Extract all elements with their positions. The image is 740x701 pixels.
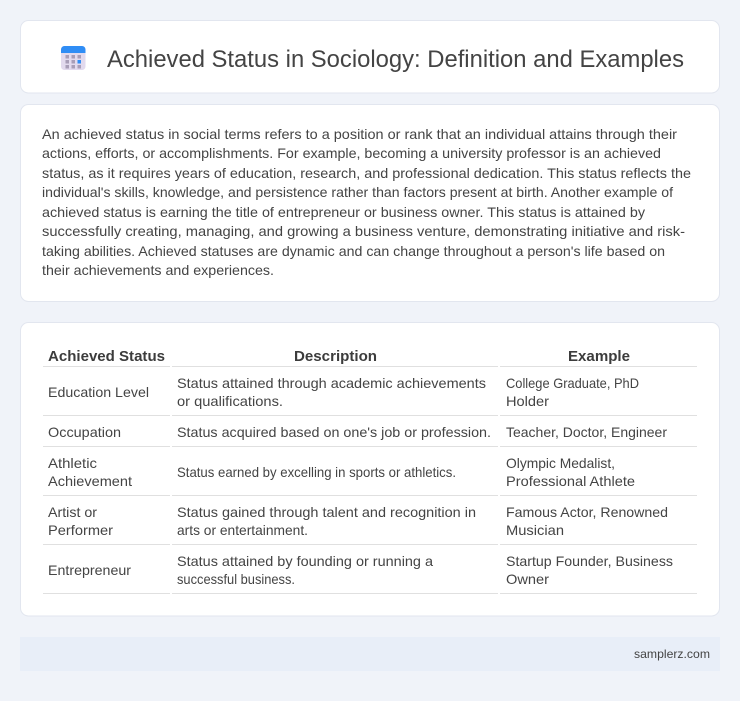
row: artist or performer <box>48 504 668 538</box>
table header: Achieved Status <box>48 348 165 365</box>
row: athletic achievement <box>48 455 635 489</box>
row: athletic achievement: Olympic Medalist, <box>506 455 615 471</box>
footer credit: samplerz.com <box>634 647 710 661</box>
text block: paragraph: taking abilities. Achieved statuses are dynamic and can change throughout a person's life based on <box>42 243 665 259</box>
panel: title card <box>20 20 720 93</box>
row: artist or performer: Status gained through talent and recognition in <box>177 504 476 520</box>
row: education level: Education Level <box>48 384 149 400</box>
text block: paragraph: individual's skills, knowledge, and persistence rather than factors present at birth. Another example of <box>42 184 673 200</box>
row: occupation: Teacher, Doctor, Engineer <box>506 424 667 440</box>
text block: paragraph: An achieved status in social terms refers to a position or rank that an individual attains through their <box>42 126 677 142</box>
row: entrepreneur: Entrepreneur <box>48 562 131 578</box>
row: athletic achievement: Achievement <box>48 473 132 489</box>
text block: paragraph: actions, efforts, or accomplishments. For example, becoming a university professor is an achieved <box>42 145 661 161</box>
icon: calendar <box>61 46 86 70</box>
row: entrepreneur <box>48 553 673 587</box>
table <box>43 348 697 594</box>
row: athletic achievement: Athletic <box>48 455 97 471</box>
row: artist or performer: Musician <box>506 522 564 538</box>
row: education level <box>48 375 639 409</box>
row: athletic achievement: Status earned by excelling in sports or athletics. <box>177 464 456 480</box>
row: occupation: Occupation <box>48 424 121 440</box>
footer <box>20 637 720 671</box>
row: education level: College Graduate, PhD <box>506 375 639 391</box>
row: education level: Status attained through academic achievements <box>177 375 486 391</box>
text block: paragraph: their achievements and experiences. <box>42 262 274 278</box>
text block: paragraph: status, as it requires years of education, research, and professional dedication. This status reflects the <box>42 165 691 181</box>
table header <box>48 348 630 365</box>
row: education level: Holder <box>506 393 549 409</box>
row: entrepreneur: Owner <box>506 571 549 587</box>
row: education level: or qualifications. <box>177 393 283 409</box>
text block: paragraph <box>42 126 691 278</box>
row: entrepreneur: Status attained by founding or running a <box>177 553 433 569</box>
row: artist or performer: arts or entertainment. <box>177 522 308 538</box>
text block: paragraph: successfully creating, managing, and growing a business venture, demonstrating initiative and risk- <box>42 223 685 239</box>
row: athletic achievement: Professional Athlete <box>506 473 635 489</box>
panel: definition paragraph <box>20 104 720 302</box>
table header: Example <box>568 348 630 365</box>
row: artist or performer: Famous Actor, Renowned <box>506 504 668 520</box>
row: artist or performer: Performer <box>48 522 113 538</box>
row: occupation: Status acquired based on one's job or profession. <box>177 424 491 440</box>
row: entrepreneur: Startup Founder, Business <box>506 553 673 569</box>
text block: paragraph: achieved status is earning the title of entrepreneur or business owner. This status is attained by <box>42 204 645 220</box>
table header: Description <box>294 348 377 365</box>
panel: table card <box>20 322 720 616</box>
row: occupation <box>48 424 667 440</box>
title: Achieved Status in Sociology: Definition and Examples <box>107 46 684 73</box>
row: entrepreneur: successful business. <box>177 571 295 587</box>
row: artist or performer: Artist or <box>48 504 97 520</box>
